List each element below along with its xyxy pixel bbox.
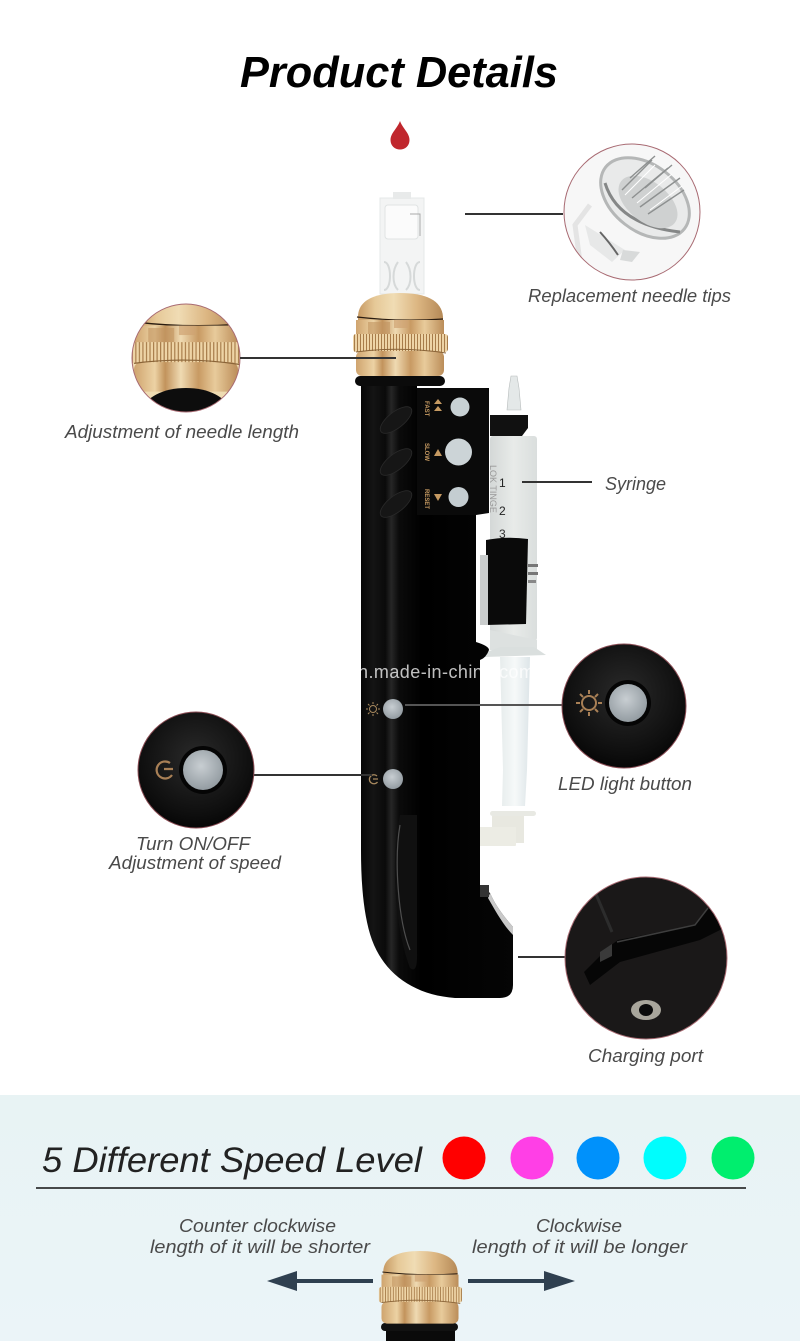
callout: needle length xyxy=(64,294,396,442)
gold collar xyxy=(353,293,448,376)
clockwise text: length of it will be longer xyxy=(472,1237,688,1257)
syringe: 2 xyxy=(499,504,506,518)
callout: LED light button xyxy=(405,644,692,794)
icon: sun xyxy=(366,702,380,716)
product: microneedle pen xyxy=(353,192,546,998)
arrow: left xyxy=(267,1271,373,1291)
pen body xyxy=(361,383,513,998)
label: Charging port xyxy=(588,1046,704,1066)
watermark: n.made-in-china.com xyxy=(358,662,534,682)
control panel xyxy=(417,388,489,515)
gold collar detail xyxy=(379,1251,462,1341)
control panel: RESET xyxy=(423,489,429,509)
callout: power and speed xyxy=(108,712,372,873)
syringe: 1 xyxy=(499,476,506,490)
grip ridges xyxy=(376,402,416,522)
clockwise text xyxy=(472,1216,688,1257)
counter clockwise text xyxy=(150,1216,371,1257)
callout: replacement needle tips xyxy=(465,141,731,306)
LED button xyxy=(383,699,403,719)
counter clockwise text: length of it will be shorter xyxy=(150,1237,371,1257)
power button xyxy=(383,769,403,789)
control panel: SLOW xyxy=(423,443,429,461)
speed colour dots xyxy=(442,1136,754,1180)
heading: 5 Different Speed Level xyxy=(42,1141,423,1180)
syringe: 3 xyxy=(499,527,506,541)
needle cartridge xyxy=(380,192,424,294)
title: Product Details xyxy=(240,48,558,97)
body inlet highlight xyxy=(395,815,417,970)
charging notch highlight xyxy=(488,893,513,935)
callout: charging port xyxy=(518,877,730,1066)
callout: power and speed: Adjustment of speed xyxy=(108,853,282,873)
label: Syringe xyxy=(605,474,666,494)
icon: power xyxy=(369,775,378,784)
syringe: LOK TINGE xyxy=(488,465,498,513)
body ring xyxy=(355,376,445,386)
arrow: right xyxy=(468,1271,575,1291)
syringe xyxy=(478,376,546,846)
icon: charging socket xyxy=(631,1000,661,1020)
icon: blood drop xyxy=(390,121,410,150)
label: LED light button xyxy=(558,774,692,794)
panel: speed level xyxy=(0,1095,800,1341)
label: Adjustment of needle length xyxy=(64,422,299,442)
label: Turn ON/OFF xyxy=(136,834,251,854)
counter clockwise text: Counter clockwise xyxy=(179,1216,336,1236)
clockwise text: Clockwise xyxy=(536,1216,622,1236)
label: Replacement needle tips xyxy=(528,286,731,306)
control panel: FAST xyxy=(423,401,429,417)
